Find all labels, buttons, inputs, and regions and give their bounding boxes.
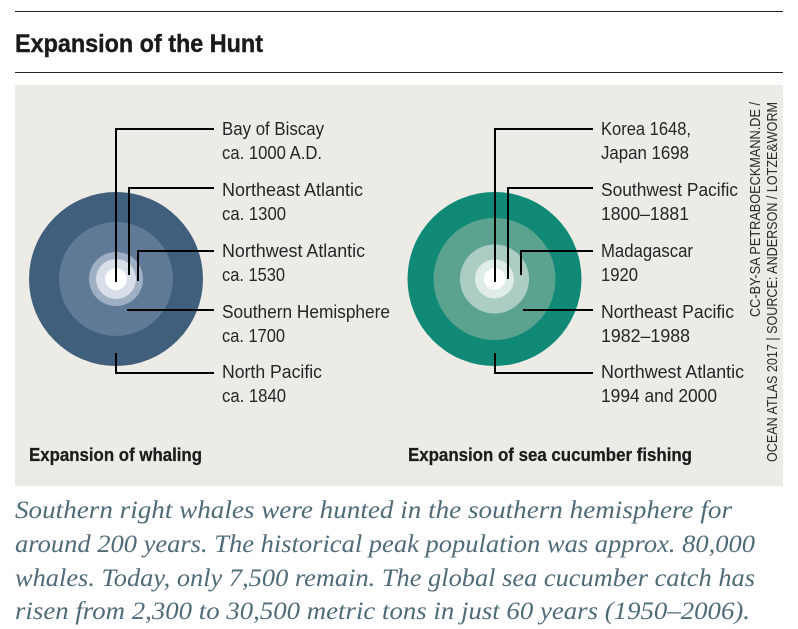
- label: Northwest Atlantic: [222, 241, 365, 285]
- label: Southern Hemisphere: Southern Hemisphere: [222, 302, 390, 322]
- title: Expansion of the Hunt: [15, 30, 264, 58]
- leader lines: sea cucumber: [495, 129, 593, 373]
- label: Bay of Biscay: ca. 1000 A.D.: [222, 143, 322, 163]
- label: Northwest Atlantic: [601, 362, 744, 406]
- label: Madagascar: 1920: [601, 265, 638, 285]
- concentric circles: whaling: [29, 192, 203, 366]
- label: Madagascar: Madagascar: [601, 241, 693, 261]
- chart: expansion of sea cucumber fishing: [408, 119, 744, 465]
- label: Korea, Japan: Japan 1698: [601, 143, 689, 163]
- label: Korea, Japan: [601, 119, 691, 163]
- label: Northwest Atlantic: 1994 and 2000: [601, 386, 717, 406]
- label: North Pacific: North Pacific: [222, 362, 322, 382]
- caption: Southern right whales were hunted in the southern hemisphere for: [15, 497, 732, 524]
- label: Bay of Biscay: Bay of Biscay: [222, 119, 324, 139]
- panel: chart background: [15, 85, 783, 486]
- label: Southwest Pacific: Southwest Pacific: [601, 180, 738, 200]
- label: Northwest Atlantic: Northwest Atlantic: [601, 362, 744, 382]
- label: Southern Hemisphere: ca. 1700: [222, 326, 285, 346]
- label: Madagascar: [601, 241, 693, 285]
- label: Northeast Atlantic: ca. 1300: [222, 204, 286, 224]
- label: Northeast Atlantic: [222, 180, 363, 224]
- credit: rotated source text: OCEAN ATLAS 2017 | SOURCE: ANDERSON / LOTZE&WORM: [765, 102, 781, 462]
- caption: around 200 years. The historical peak population was approx. 80,000: [15, 531, 756, 558]
- label: Southwest Pacific: 1800–1881: [601, 204, 689, 224]
- leader lines: whaling: [116, 129, 214, 373]
- label: North Pacific: [222, 362, 322, 406]
- label: North Pacific: ca. 1840: [222, 386, 286, 406]
- label: Northeast Pacific: [601, 302, 734, 346]
- label: Northeast Pacific: 1982–1988: [601, 326, 690, 346]
- label: Bay of Biscay: [222, 119, 324, 163]
- caption: whales. Today, only 7,500 remain. The global sea cucumber catch has: [15, 565, 755, 592]
- caption: [15, 497, 756, 625]
- label: Southwest Pacific: [601, 180, 738, 224]
- credit: rotated source text: [748, 101, 781, 462]
- label: Northeast Atlantic: Northeast Atlantic: [222, 180, 363, 200]
- subheading: sea cucumber: Expansion of sea cucumber fishing: [408, 445, 692, 465]
- credit: rotated source text: CC-BY-SA PETRABOECKMANN.DE /: [748, 101, 764, 317]
- concentric circles: sea cucumber: [408, 192, 582, 366]
- label: Northwest Atlantic: Northwest Atlantic: [222, 241, 365, 261]
- label: Southern Hemisphere: [222, 302, 390, 346]
- label: Korea, Japan: Korea 1648,: [601, 119, 691, 139]
- label: Northwest Atlantic: ca. 1530: [222, 265, 285, 285]
- caption: risen from 2,300 to 30,500 metric tons in just 60 years (1950–2006).: [15, 598, 750, 625]
- label: Northeast Pacific: Northeast Pacific: [601, 302, 734, 322]
- chart: expansion of whaling: [29, 119, 390, 465]
- subheading: whaling: Expansion of whaling: [29, 445, 202, 465]
